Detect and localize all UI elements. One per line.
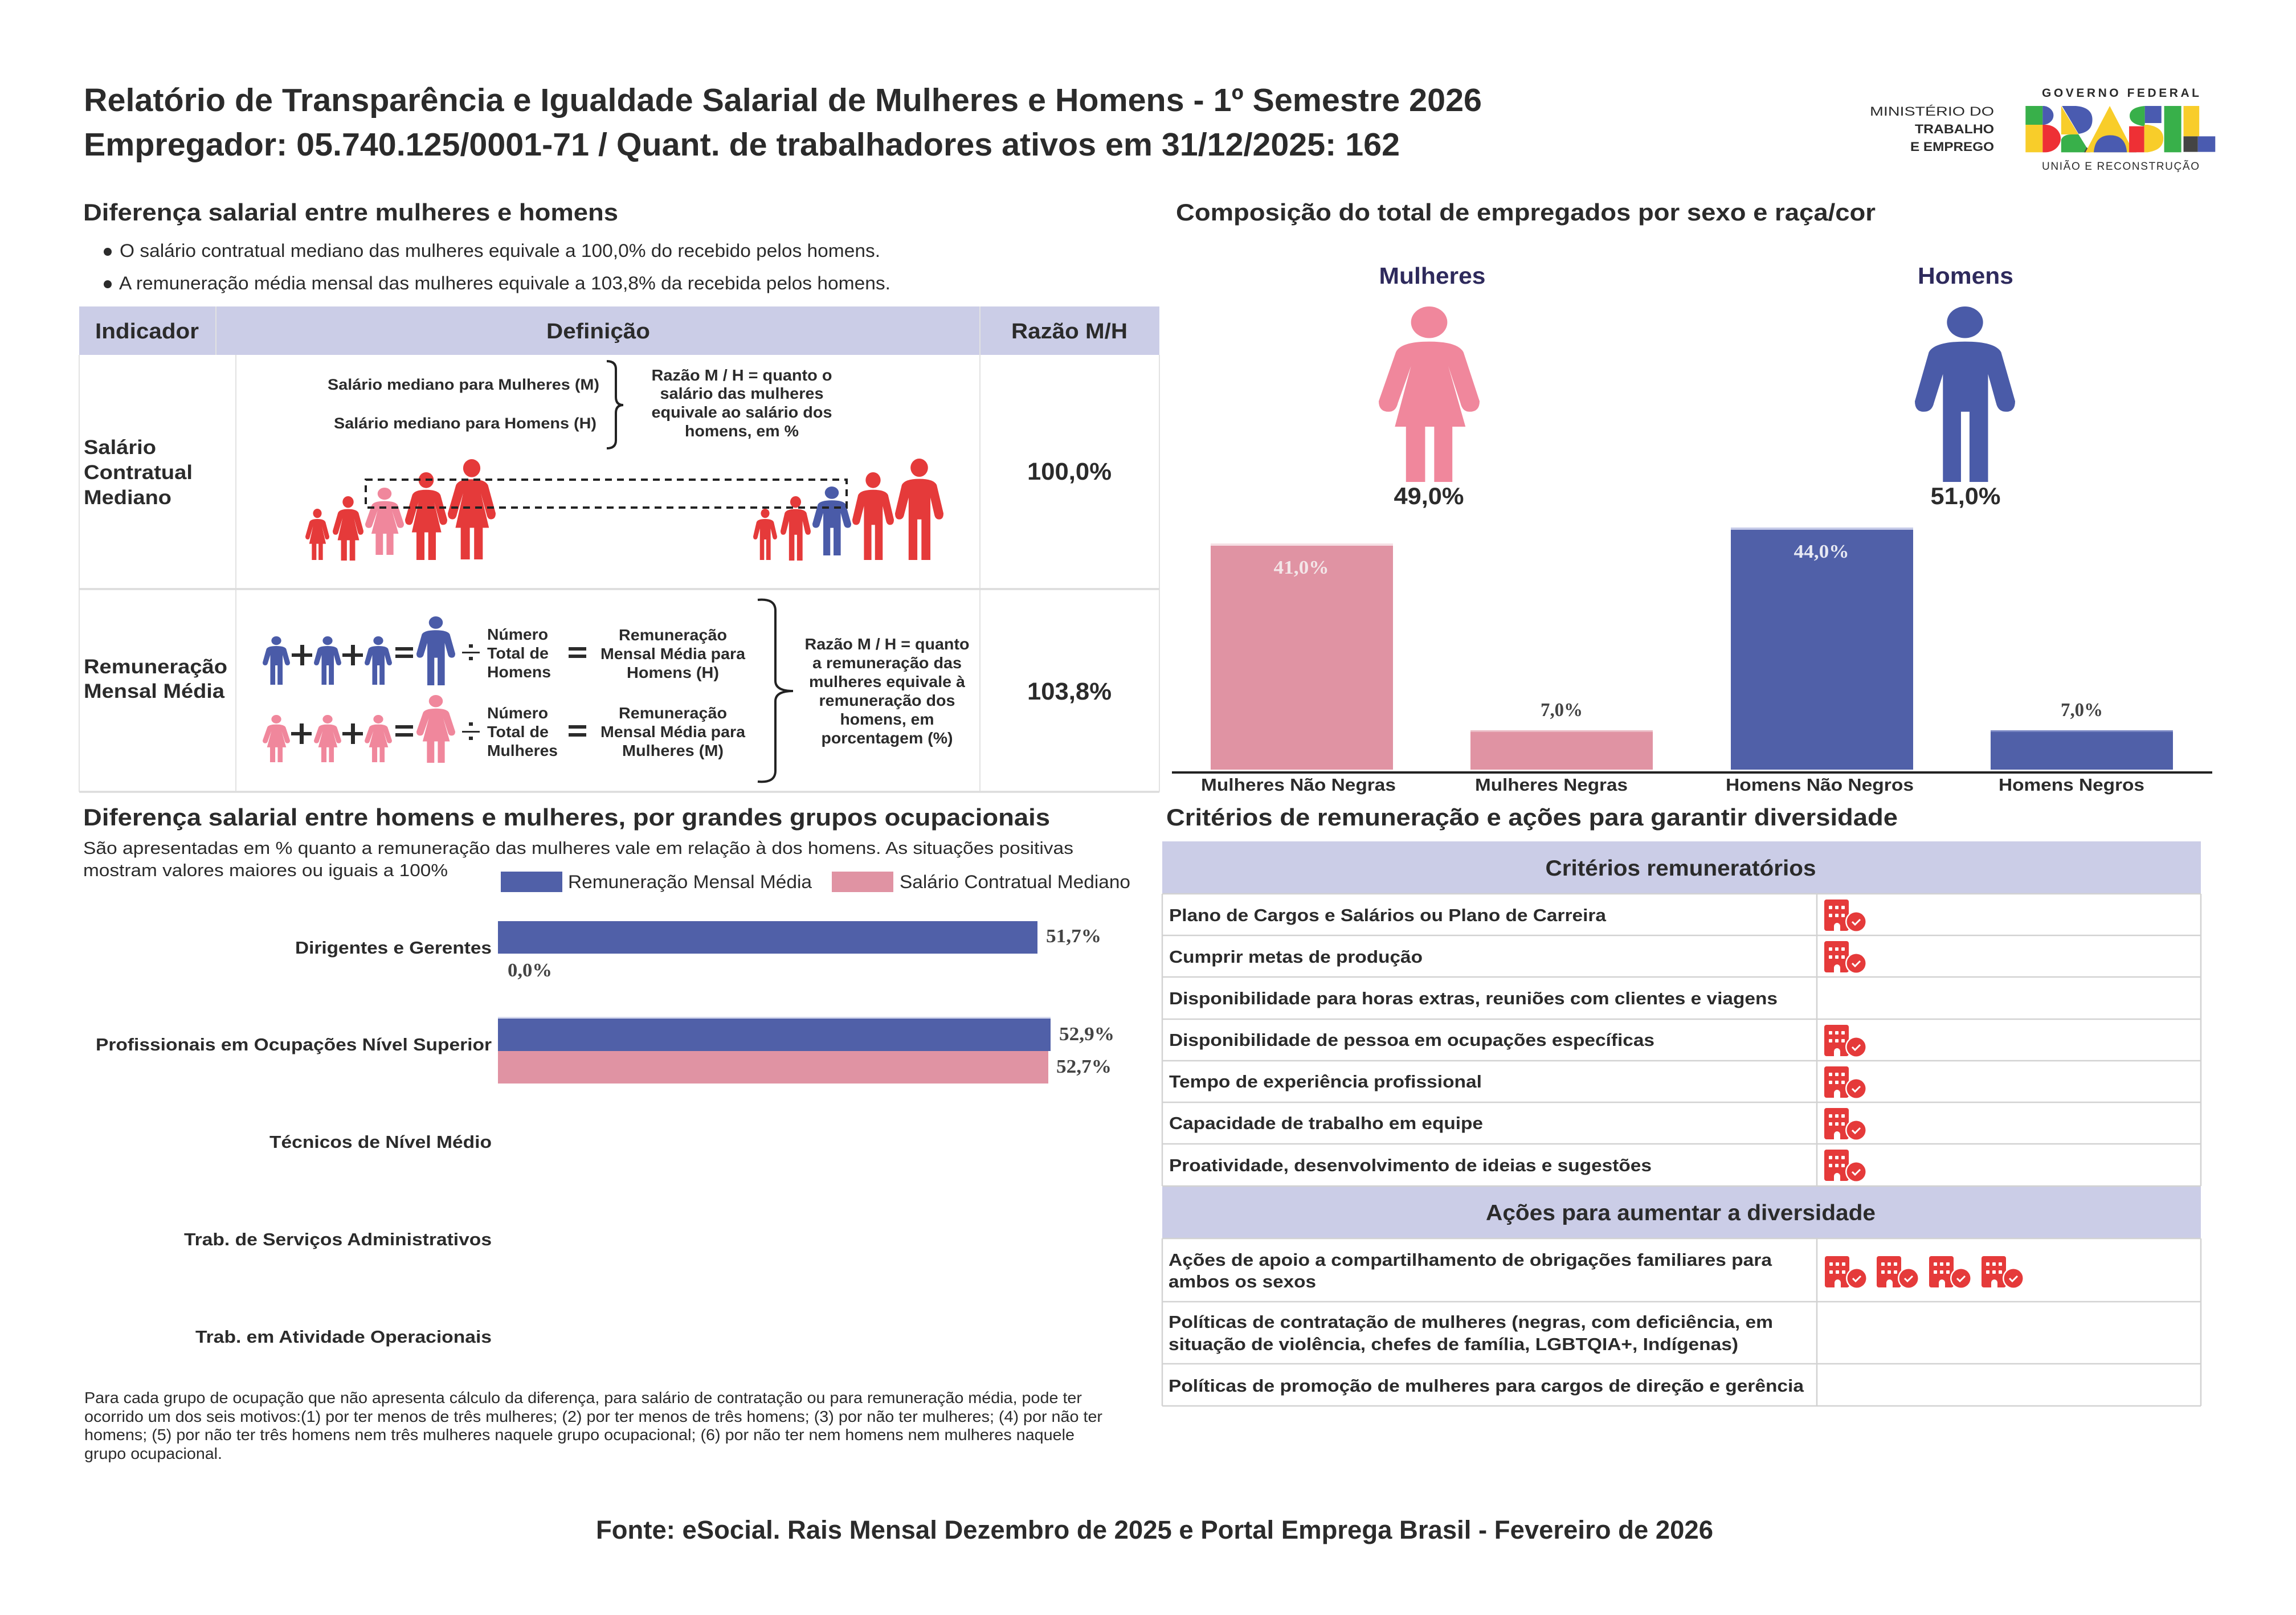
row label: salário contratual mediano: Contratual — [84, 461, 193, 484]
figure: homens: Homens — [1918, 263, 2013, 289]
row texts: actions: situação de violência, chefes de família, LGBTQIA+, Indígenas) — [1169, 1334, 1738, 1354]
category labels — [96, 938, 492, 1347]
bullet list: summary: A remuneração média mensal das mulheres equivale a 103,8% da recebida pelos homens. — [119, 273, 890, 293]
axis labels — [1201, 775, 2144, 795]
axis labels: Homens Não Negros — [1726, 775, 1914, 795]
logo: governo federal brasil — [2025, 87, 2215, 173]
icons: action companies — [1825, 1256, 2024, 1289]
bar chart: occupational groups — [96, 921, 1114, 1347]
row label: remuneração mensal média: Remuneração — [84, 656, 227, 678]
title — [84, 82, 1482, 163]
bullet list: summary — [104, 240, 890, 293]
figure: mulheres: 49,0% — [1394, 483, 1464, 509]
equation: men: Homens — [487, 663, 551, 681]
bullet list: summary: O salário contratual mediano das mulheres equivale a 100,0% do recebido pelos homens. — [120, 240, 880, 261]
bars: dirigentes e gerentes: 51,7% — [1046, 926, 1101, 947]
icons: criteria companies — [1824, 900, 1867, 1183]
text: ratio explanation average: a remuneração das — [812, 654, 962, 672]
text: ratio explanation median: Razão M / H = quanto o — [652, 366, 832, 384]
logo: ministério do trabalho e emprego: TRABALHO — [1915, 122, 1994, 136]
row label: remuneração mensal média: Mensal Média — [84, 680, 225, 702]
equation: women: Número — [487, 704, 548, 722]
equation: women: Mulheres (M) — [622, 742, 724, 759]
value: 103,8%: 103,8% — [1027, 678, 1112, 705]
table header: razão: Razão M/H — [1011, 320, 1127, 344]
bars: profissionais: 52,7% — [1056, 1056, 1112, 1077]
equation: men: Mensal Média para — [600, 645, 745, 663]
category labels: Dirigentes e Gerentes — [295, 938, 492, 958]
logo: governo federal brasil: GOVERNO FEDERAL — [2042, 87, 2199, 100]
category labels: Profissionais em Ocupações Nível Superior — [96, 1035, 492, 1054]
logo: ministério do trabalho e emprego: MINISTÉRIO DO — [1870, 104, 1994, 118]
text: salário mediano definitions: Salário mediano para Mulheres (M) — [328, 376, 599, 393]
text: ratio explanation median: homens, em % — [685, 422, 799, 440]
bars: dirigentes e gerentes — [498, 921, 1101, 981]
legend: Salário Contratual Mediano — [900, 872, 1130, 892]
axis labels: Homens Negros — [1999, 775, 2144, 795]
bar: homens não negros — [1731, 528, 1913, 770]
header: critérios remuneratórios: Critérios remuneratórios — [1545, 856, 1816, 881]
figure: homens: 51,0% — [1930, 483, 2001, 509]
brace: median — [607, 361, 623, 448]
heading: critérios: Critérios de remuneração e ações para garantir diversidade — [1166, 804, 1898, 831]
footnote: homens; (5) por não ter três homens nem três mulheres naquele grupo ocupacional; (6) por não ter nem homens nem mulheres naquele — [84, 1426, 1075, 1444]
row texts: criteria — [1169, 905, 1778, 1175]
bar: mulheres não negras: 41,0% — [1274, 557, 1329, 578]
logo: ministério do trabalho e emprego: E EMPREGO — [1910, 140, 1994, 154]
row texts: criteria: Disponibilidade para horas extras, reuniões com clientes e viagens — [1169, 988, 1778, 1008]
icons: men median row — [753, 459, 943, 561]
row label: salário contratual mediano — [84, 436, 193, 509]
bar chart: composition by sex and race — [1172, 528, 2212, 795]
row texts: actions — [1169, 1250, 1804, 1396]
text: ratio explanation average: mulheres equivale à — [809, 673, 965, 690]
text: ratio explanation average: remuneração dos — [819, 692, 955, 709]
text: ratio explanation median — [652, 366, 832, 440]
row texts: actions: Ações de apoio a compartilhamento de obrigações familiares para — [1169, 1250, 1772, 1270]
text: ratio explanation median: salário das mulheres — [660, 385, 824, 402]
dashed median box — [366, 480, 847, 508]
row texts: criteria: Cumprir metas de produção — [1169, 947, 1423, 967]
bar: mulheres negras — [1470, 700, 1653, 770]
footer: source: Fonte: eSocial. Rais Mensal Dezembro de 2025 e Portal Emprega Brasil - Fevereiro de 2026 — [596, 1515, 1713, 1544]
text: ratio explanation average: porcentagem (%) — [822, 729, 953, 747]
category labels: Trab. de Serviços Administrativos — [184, 1229, 492, 1249]
axis labels: Mulheres Negras — [1475, 775, 1628, 795]
row texts: criteria: Proatividade, desenvolvimento de ideias e sugestões — [1169, 1155, 1652, 1175]
equation: women: Mensal Média para — [600, 723, 745, 741]
bar: homens negros — [1991, 700, 2173, 770]
bar: homens negros: 7,0% — [2061, 700, 2103, 721]
row texts: criteria: Plano de Cargos e Salários ou Plano de Carreira — [1169, 905, 1607, 925]
footnote — [84, 1389, 1102, 1462]
equation: men: Total de — [487, 644, 549, 662]
equation: men — [263, 616, 745, 685]
text: ratio explanation average: Razão M / H = quanto — [804, 635, 970, 653]
equation: men: Número — [487, 625, 548, 643]
legend — [501, 872, 1130, 892]
text: chart description: mostram valores maiores ou iguais a 100% — [83, 860, 448, 880]
title: Empregador: 05.740.125/0001-71 / Quant. de trabalhadores ativos em 31/12/2025: 162 — [84, 126, 1400, 163]
bar: mulheres negras: 7,0% — [1541, 700, 1583, 721]
equation: men: Homens (H) — [627, 664, 719, 681]
text: chart description: São apresentadas em % quanto a remuneração das mulheres vale em relação à dos homens. As situações positivas — [83, 838, 1073, 858]
row texts: criteria: Capacidade de trabalho em equipe — [1169, 1113, 1483, 1133]
equation: men: Remuneração — [619, 626, 727, 644]
bars: profissionais — [498, 1017, 1114, 1084]
footnote: grupo ocupacional. — [84, 1445, 222, 1462]
row label: salário contratual mediano: Salário — [84, 436, 156, 459]
text: ratio explanation average — [804, 635, 970, 747]
value: 100,0%: 100,0% — [1027, 459, 1112, 485]
figure: mulheres: Mulheres — [1379, 263, 1486, 289]
panel: criteria table — [1162, 841, 2201, 1406]
row texts: actions: Políticas de promoção de mulheres para cargos de direção e gerência — [1169, 1376, 1804, 1396]
footnote: ocorrido um dos seis motivos:(1) por ter menos de três mulheres; (2) por ter menos de três homens; (3) por não ter mulheres; (4) por não ter — [84, 1408, 1102, 1425]
header: ações para aumentar a diversidade: Ações para aumentar a diversidade — [1486, 1201, 1876, 1225]
figure: homens — [1915, 263, 2015, 509]
bar: homens não negros: 44,0% — [1794, 541, 1849, 562]
row label: salário contratual mediano: Mediano — [84, 486, 171, 509]
row texts: criteria: Disponibilidade de pessoa em ocupações específicas — [1169, 1030, 1654, 1050]
brace: average — [758, 600, 793, 782]
category labels: Trab. em Atividade Operacionais — [195, 1327, 492, 1347]
text: salário mediano definitions: Salário mediano para Homens (H) — [334, 415, 597, 432]
bars: profissionais: 52,9% — [1059, 1024, 1114, 1045]
icons: women median row — [305, 459, 496, 561]
category labels: Técnicos de Nível Médio — [269, 1132, 492, 1152]
table header: definição: Definição — [546, 320, 650, 344]
figure: mulheres — [1379, 263, 1486, 509]
legend: Remuneração Mensal Média — [568, 872, 812, 892]
table header: indicador: Indicador — [95, 320, 199, 344]
footnote: Para cada grupo de ocupação que não apresenta cálculo da diferença, para salário de contratação ou para remuneração média, pode ter — [84, 1389, 1082, 1407]
logo: governo federal brasil: UNIÃO E RECONSTRUÇÃO — [2042, 160, 2199, 173]
text: chart description — [83, 838, 1073, 880]
heading: composição: Composição do total de empregados por sexo e raça/cor — [1176, 199, 1876, 226]
heading: grupos ocupacionais: Diferença salarial entre homens e mulheres, por grandes grupos ocupacionais — [83, 804, 1050, 831]
panel: indicator table — [79, 306, 1159, 792]
title: Relatório de Transparência e Igualdade Salarial de Mulheres e Homens - 1º Semestre 2026 — [84, 82, 1482, 118]
row label: remuneração mensal média — [84, 656, 227, 702]
equation: women — [263, 695, 745, 763]
text: salário mediano definitions — [328, 376, 599, 432]
axis labels: Mulheres Não Negras — [1201, 775, 1396, 795]
equation: women: Mulheres — [487, 742, 558, 759]
row texts: actions: Políticas de contratação de mulheres (negras, com deficiência, em — [1169, 1312, 1773, 1332]
row texts: actions: ambos os sexos — [1169, 1271, 1316, 1291]
equation: women: Total de — [487, 723, 549, 741]
bars: dirigentes e gerentes: 0,0% — [508, 960, 552, 981]
logo: ministério do trabalho e emprego — [1870, 104, 1994, 154]
equation: women: Remuneração — [619, 704, 727, 722]
row texts: criteria: Tempo de experiência profissional — [1169, 1072, 1482, 1091]
heading: diferença salarial: Diferença salarial entre mulheres e homens — [83, 199, 618, 226]
bar: mulheres não negras — [1211, 543, 1393, 770]
text: ratio explanation average: homens, em — [840, 710, 934, 728]
text: ratio explanation median: equivale ao salário dos — [652, 403, 832, 421]
